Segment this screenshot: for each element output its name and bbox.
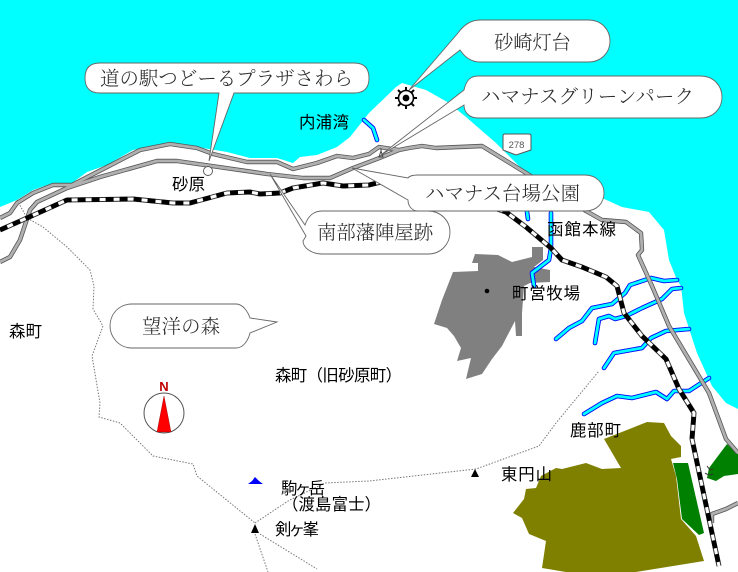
label: 渡島富士: （渡島富士） [282, 496, 381, 514]
callout: ハマナス台場公園 [352, 168, 604, 211]
callout: 南部藩陣屋跡 [270, 174, 450, 254]
icon: compass: N [159, 379, 169, 394]
green area: park strip [673, 463, 704, 535]
label: 東円山: 東円山 [501, 466, 552, 484]
label: 内浦湾: 内浦湾 [299, 114, 349, 132]
callout: ハマナス台場公園: ハマナス台場公園 [425, 183, 580, 205]
icon: route 278 shield: 278 [509, 140, 524, 151]
icon: peak 剣ヶ峯 [251, 524, 259, 533]
icon: lighthouse [395, 87, 417, 109]
icon: route 278 shield [503, 134, 531, 155]
label: 鹿部町: 鹿部町 [570, 422, 621, 440]
icon: blue mountain [248, 477, 263, 484]
label: 砂原: 砂原 [172, 176, 205, 194]
sea [0, 0, 738, 409]
callout: 道の駅つどーるプラザさわら: 道の駅つどーるプラザさわら [100, 68, 353, 90]
label: 函館本線: 函館本線 [547, 221, 616, 239]
label: 剣ヶ峯: 剣ヶ峯 [275, 521, 319, 539]
green area: east [707, 444, 738, 481]
callout: 望洋の森 [110, 304, 277, 348]
label: 駒ヶ岳: 駒ヶ岳 [281, 480, 325, 498]
label: 森町: 森町 [9, 323, 42, 341]
rivers [364, 120, 709, 414]
label: 森町（旧砂原町）: 森町（旧砂原町） [275, 367, 402, 385]
callout: 砂崎灯台 [409, 20, 610, 90]
forest area: town ranch [434, 247, 550, 379]
callout: 砂崎灯台: 砂崎灯台 [494, 32, 571, 54]
callout: ハマナスグリーンパーク [381, 76, 722, 155]
icon: park marker [379, 148, 383, 157]
callout: 道の駅つどーるプラザさわら [85, 63, 369, 161]
callout: 南部藩陣屋跡: 南部藩陣屋跡 [317, 222, 434, 244]
forest area: olive [513, 422, 704, 572]
icon: compass [144, 379, 184, 433]
label: 町営牧場: 町営牧場 [512, 285, 580, 303]
callout: ハマナスグリーンパーク: ハマナスグリーンパーク [481, 87, 694, 108]
roads [0, 144, 738, 523]
municipal boundaries [17, 200, 599, 572]
callout: 望洋の森: 望洋の森 [142, 316, 220, 338]
icon: peak 東円山 [471, 469, 479, 477]
icon: ranch dot [485, 289, 489, 293]
icon: road station marker [204, 166, 212, 176]
icon: small mark east [705, 466, 713, 475]
railway [0, 180, 719, 566]
